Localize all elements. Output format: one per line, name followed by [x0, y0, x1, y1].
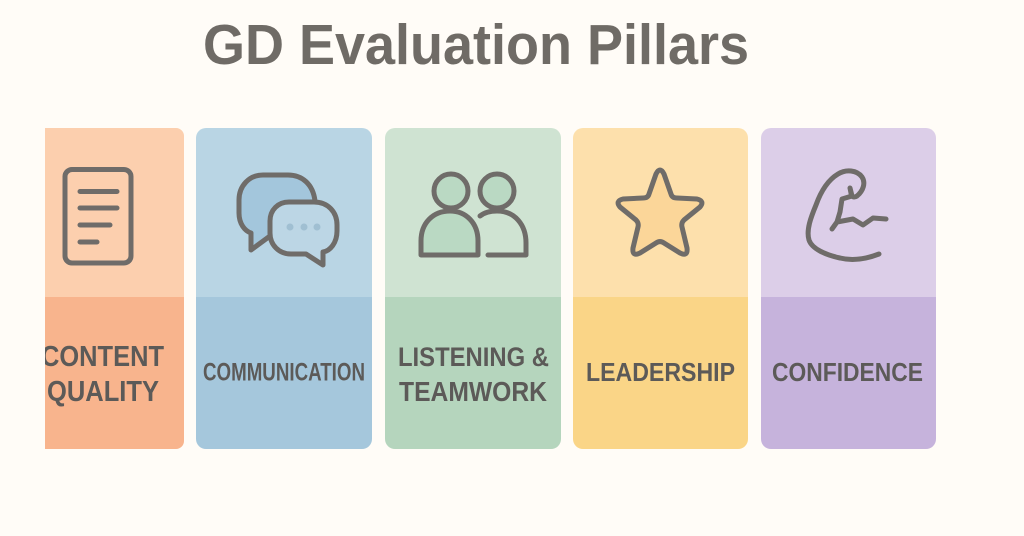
- icon: chat bubbles: [239, 175, 337, 265]
- panel: communication: [196, 128, 372, 449]
- label: content quality: [45, 346, 164, 406]
- label: listening and teamwork: [399, 347, 548, 402]
- panel: content quality: [41, 128, 184, 449]
- panel: listening and teamwork: [385, 128, 561, 449]
- label: listening and teamwork: TEAMWORK: [399, 376, 547, 407]
- icon: two people: [421, 174, 526, 255]
- icon: chat dots: [286, 224, 320, 230]
- icon: document: [65, 170, 131, 263]
- icon: flexed arm: [808, 171, 886, 259]
- label: content quality: CONTENT: [41, 341, 164, 373]
- panel: confidence: [761, 128, 936, 449]
- label: listening and teamwork: LISTENING &: [398, 342, 549, 372]
- icon: star: [618, 170, 702, 254]
- label: content quality: QUALITY: [47, 376, 159, 408]
- label: leadership: LEADERSHIP: [586, 357, 735, 387]
- label: confidence: CONFIDENCE: [772, 357, 923, 387]
- title: GD Evaluation Pillars: [203, 13, 749, 77]
- panel: leadership: [573, 128, 748, 449]
- label: communication: COMMUNICATION: [203, 358, 365, 386]
